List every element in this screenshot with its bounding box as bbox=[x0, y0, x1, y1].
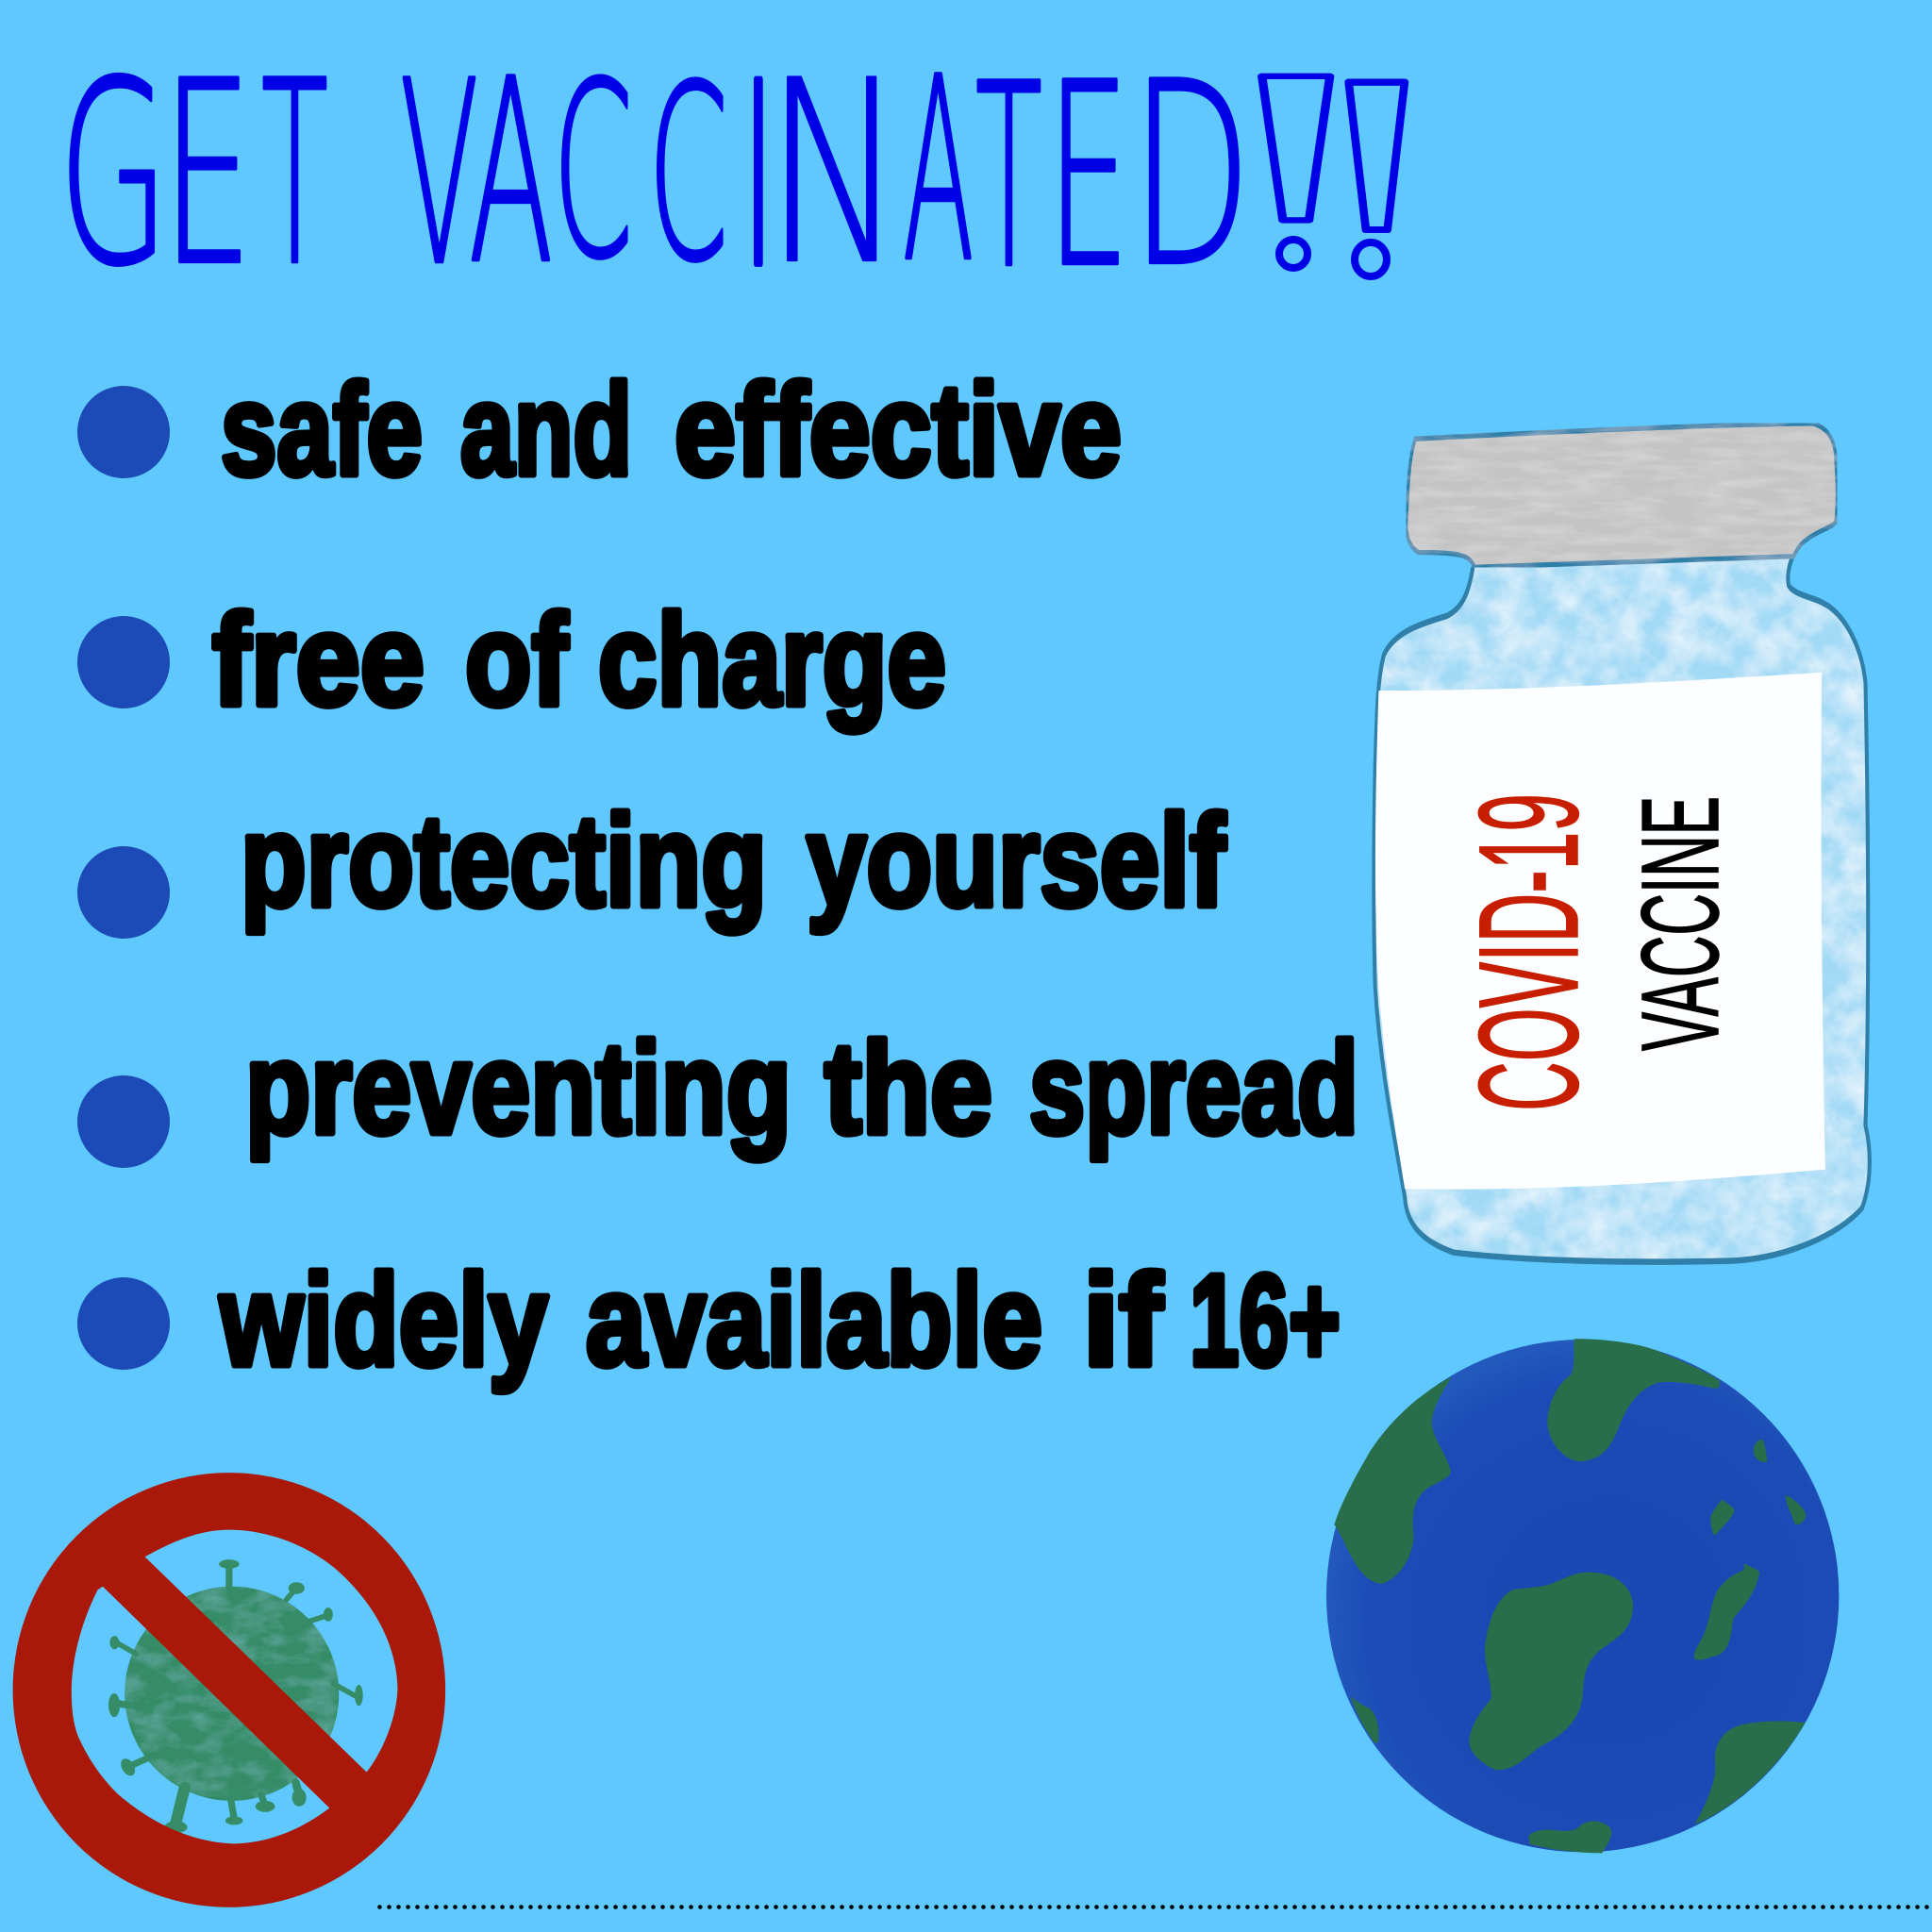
bullet: safe and effective bbox=[77, 358, 1122, 503]
vial label bbox=[1375, 673, 1825, 1190]
bullet list bbox=[77, 358, 1358, 1393]
title: D bbox=[1131, 30, 1251, 323]
title: A bbox=[469, 25, 553, 320]
no-virus prohibition sign bbox=[13, 1473, 445, 1907]
dotted signature line bbox=[379, 1905, 1932, 1909]
bullet: protecting yourself bbox=[77, 789, 1226, 939]
icon: virus bbox=[108, 1559, 363, 1833]
ocean bbox=[1326, 1340, 1839, 1852]
title bbox=[69, 72, 1409, 280]
bullet: preventing the spread bbox=[77, 1016, 1358, 1168]
bullet: safe and effective: effective bbox=[675, 358, 1122, 503]
bullet: widely available if 16+: widely bbox=[219, 1248, 548, 1393]
bullet: widely available if 16+: available bbox=[586, 1248, 1042, 1393]
title: A bbox=[903, 25, 974, 318]
bullet: free of charge: charge bbox=[598, 588, 946, 733]
bullet: free of charge bbox=[77, 588, 946, 733]
bullet: safe and effective: and bbox=[460, 358, 632, 503]
title: G bbox=[58, 29, 169, 322]
bullet: protecting yourself: yourself bbox=[807, 789, 1226, 934]
bullet: free of charge: free bbox=[212, 588, 425, 733]
bullet: preventing the spread: spread bbox=[1029, 1016, 1358, 1161]
title: I bbox=[741, 30, 775, 323]
bullet: widely available if 16+: 16+ bbox=[1190, 1248, 1341, 1393]
globe illustration bbox=[1326, 1339, 1839, 1853]
title: ! bbox=[1313, 5, 1441, 368]
continents bbox=[1334, 1339, 1807, 1853]
vaccine vial illustration: COVID-19 bbox=[1449, 793, 1607, 1111]
bullet: preventing the spread: the bbox=[824, 1016, 992, 1161]
bullet: safe and effective: safe bbox=[221, 358, 423, 503]
vial cap bbox=[1407, 424, 1837, 567]
label text: VACCINE: VACCINE bbox=[1619, 796, 1741, 1051]
bullet: widely available if 16+ bbox=[77, 1248, 1341, 1393]
title: E bbox=[1047, 31, 1129, 324]
bullet: protecting yourself: protecting bbox=[241, 789, 767, 934]
title: V bbox=[400, 28, 478, 321]
title: T bbox=[261, 27, 328, 322]
bullet: widely available if 16+: if bbox=[1083, 1248, 1163, 1393]
title: T bbox=[975, 30, 1042, 325]
vial body bbox=[1374, 558, 1870, 1262]
title: C bbox=[553, 32, 633, 312]
title: E bbox=[162, 29, 252, 322]
bullet: free of charge: of bbox=[465, 588, 569, 733]
vaccine vial illustration bbox=[1374, 424, 1870, 1262]
title: C bbox=[648, 35, 728, 315]
bullet: preventing the spread: preventing bbox=[245, 1016, 791, 1161]
icon: red prohibition ring and slash bbox=[13, 1473, 445, 1907]
title: N bbox=[765, 27, 905, 321]
title: ! bbox=[1219, 1, 1374, 356]
